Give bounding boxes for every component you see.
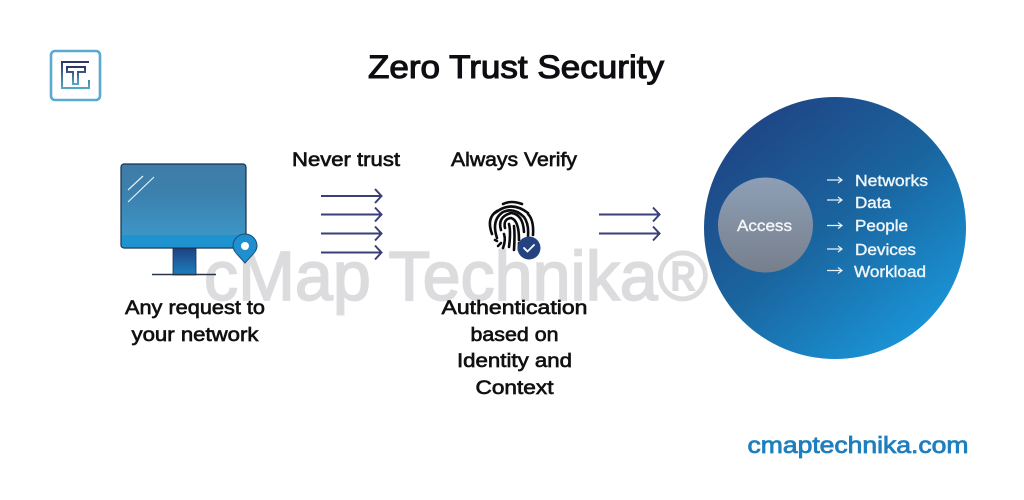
title: Zero Trust Security [368, 49, 665, 85]
heading: never trust: Never trust [292, 149, 401, 171]
arrows: to access [599, 208, 660, 240]
text: authentication: Context [476, 377, 554, 399]
icon: location pin [233, 234, 257, 263]
icon: fingerprint [490, 202, 540, 260]
logo [51, 51, 100, 100]
website url: cmaptechnika.com [748, 432, 968, 458]
watermark: cMap Technika® [204, 237, 708, 315]
list labels: People [855, 218, 908, 235]
icon: monitor [121, 164, 257, 275]
text: authentication: based on [470, 324, 558, 346]
panel: access circle [704, 97, 966, 359]
icon: check badge [518, 236, 540, 260]
arrows: never trust [321, 189, 382, 260]
text: authentication: Identity and [457, 350, 572, 372]
access node: Access [737, 218, 792, 235]
list labels: Data [855, 195, 891, 212]
list labels: Devices [855, 242, 916, 259]
text: any request: your network [132, 324, 259, 346]
list labels [854, 173, 928, 281]
list labels: Workload [854, 264, 926, 281]
list labels: Networks [855, 173, 928, 190]
text: authentication: Authentication [442, 297, 588, 319]
heading: always verify: Always Verify [451, 149, 577, 171]
text: any request: Any request to [125, 297, 265, 319]
list arrows [827, 177, 842, 274]
access node [718, 178, 813, 272]
